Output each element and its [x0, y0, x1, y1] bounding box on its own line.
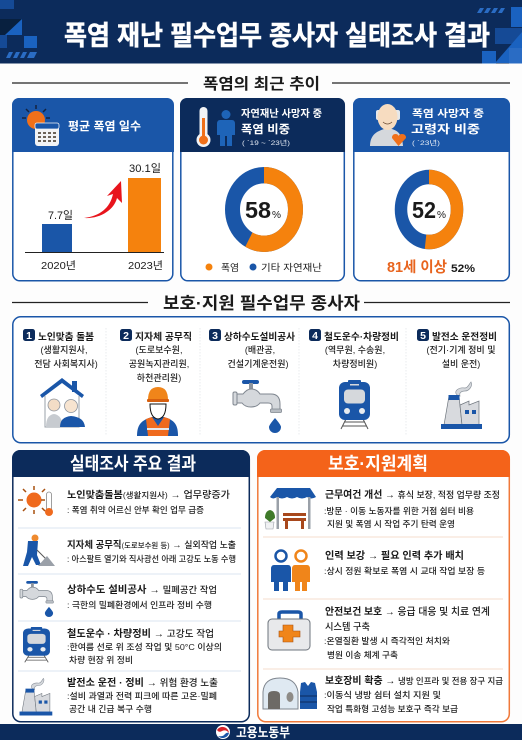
plan: staffing: 인력 보강 → 필요 인력 추가 배치: [325, 549, 464, 562]
worker 3: water and sewage: 상하수도설비공사: [224, 331, 295, 343]
result: power plant: 공간 내 긴급 복구 수행: [69, 704, 152, 714]
panel heading: 폭염 사망자 중: [412, 107, 484, 120]
worker 3: water and sewage: 건설기계운전원): [228, 358, 288, 369]
panel: elderly share of heatwave deaths: [353, 98, 510, 281]
result: local government: [23, 534, 236, 566]
icon: thermometer: [196, 107, 210, 147]
icon: government logo: [216, 725, 230, 739]
panel heading: 자연재난 사망자 중: [241, 107, 322, 120]
bar chart: 2023년: [128, 260, 163, 272]
result: elderly care: [18, 486, 230, 516]
section heading: essential workers: 보호·지원 필수업무 종사자: [163, 294, 360, 313]
donut chart: 52 percent: [401, 177, 457, 242]
plan: protective equipment: 보호장비 확충 → 냉방 인프라 및 전용 장구 지급: [325, 674, 503, 687]
result: water and sewage: [20, 581, 217, 617]
header banner: [0, 0, 522, 64]
result: power plant: 발전소 운전 · 정비 → 위험 환경 노출: [67, 676, 218, 689]
result: railway: :한여름 선로 위 조성 작업 및 50°C 이상의: [67, 642, 222, 652]
icon: sun and thermometer: [18, 486, 53, 516]
worker 4: railway: 철도운수·차량정비: [324, 331, 399, 343]
bar chart: 7.7일: [48, 208, 73, 222]
plan: staffing: :상시 정원 확보로 폭염 시 교대 작업 보장 등: [324, 566, 485, 576]
worker 5: power plant: (전기·기계 정비 및: [427, 344, 495, 355]
panel heading: 보호·지원계획: [328, 454, 428, 474]
worker 3: water and sewage: [209, 329, 295, 433]
panel: survey key results: [12, 450, 250, 722]
title: 폭염 재난 필수업무 종사자 실태조사 결과: [64, 21, 490, 51]
ministry name: 고용노동부: [236, 725, 290, 740]
plan: working conditions: [265, 488, 500, 529]
worker 2: local government: (도로보수원,: [136, 344, 182, 355]
result: local government: : 아스팔트 열기와 직사광선 아래 고강도 노동 수행: [67, 554, 236, 564]
plan: working conditions: 지원 및 폭염 시 작업 주기 탄력 운영: [327, 519, 455, 529]
result: water and sewage: 상하수도 설비공사 → 밀폐공간 작업: [67, 583, 217, 596]
caption: age 81 and over: 52%: [451, 263, 475, 275]
result: elderly care: : 폭염 취약 어르신 안부 확인 업무 급증: [67, 505, 204, 515]
result: elderly care: 노인맞춤돌봄 (생활지원사) → 업무량증가: [67, 489, 230, 501]
donut chart: 58 percent: %: [272, 209, 281, 221]
panel heading: ( `23년): [412, 138, 440, 147]
icon: factory: [441, 382, 482, 429]
panel heading: ( `19 ~ `23년): [242, 138, 290, 147]
legend: 폭염: [221, 263, 239, 274]
icon: shelter with bench: [265, 488, 316, 529]
section heading: recent trend: 폭염의 최근 추이: [203, 75, 320, 93]
legend: [206, 263, 322, 274]
icon: train: [23, 627, 50, 662]
result: railway: 철도운수 · 차량정비 → 고강도 작업: [67, 627, 214, 640]
arrow: increase: [84, 181, 122, 218]
panel: heatwave share of natural disaster deaths: [180, 98, 345, 281]
plan: safety and health: [268, 605, 490, 660]
result: water and sewage: : 극한의 밀폐환경에서 인프라 정비 수행: [67, 600, 212, 610]
result: power plant: :설비 과열과 전력 피크에 따른 고온·밀폐: [67, 691, 217, 701]
plan: working conditions: 근무여건 개선 → 휴식 보장, 적정 업무량 조정: [325, 488, 500, 501]
result: local government: 지자체 공무직(도로보수원 등) → 실외작업 노출: [67, 539, 236, 551]
panel: protection and support plan: [257, 450, 510, 722]
icon: road worker with shovel: [23, 534, 55, 566]
worker 2: local government: 공원녹지관리원,: [129, 358, 189, 369]
worker 5: power plant: 발전소 운전정비: [432, 331, 497, 343]
plan: safety and health: 병원 이송 체계 구축: [327, 650, 398, 660]
worker 4: railway: [309, 329, 399, 429]
panel heading: [241, 107, 322, 147]
result: power plant: [20, 676, 218, 716]
icon: faucet: [233, 380, 282, 433]
panel: average heatwave days: [12, 98, 174, 281]
panel heading: 폭염 비중: [241, 123, 290, 136]
donut chart: 58 percent: [232, 175, 296, 244]
worker 3: water and sewage: 3: [212, 330, 218, 342]
icon: cooling tent and vest: [263, 678, 317, 709]
result: railway: [23, 627, 222, 665]
panel: essential worker groups: [13, 317, 509, 443]
worker 2: local government: 지자체 공무직: [135, 331, 192, 343]
worker 4: railway: (역무원, 수송원,: [325, 344, 385, 355]
plan: protective equipment: :이동식 냉방 쉼터 설치 지원 및: [324, 690, 441, 700]
plan: safety and health: 안전보건 보호 → 응급 대응 및 치료 연계: [325, 605, 490, 618]
result: railway: 차량 현장 위 정비: [69, 655, 133, 665]
bar chart: 2020년: [41, 260, 76, 272]
worker 5: power plant: 설비 운전): [442, 358, 480, 369]
icon: first aid kit: [268, 612, 310, 650]
icon: sun and calendar: [22, 105, 59, 146]
panel heading: [411, 107, 484, 147]
worker 5: power plant: [417, 329, 497, 429]
donut chart: 52 percent: %: [437, 209, 446, 221]
plan: staffing: [271, 549, 485, 591]
icon: road worker: [137, 387, 178, 436]
worker 1: elderly care: 전담 사회복지사): [34, 358, 98, 369]
plan: protective equipment: [263, 674, 503, 714]
plan: safety and health: 시스템 구축: [325, 621, 370, 633]
donut chart: 58 percent: 58: [245, 197, 271, 223]
icon: faucet: [20, 581, 53, 617]
icon: home with elderly couple: [40, 378, 85, 427]
panel heading: 실태조사 주요 결과: [70, 454, 196, 474]
icon: factory: [20, 678, 52, 716]
icon: elderly person with heart: [370, 104, 406, 146]
worker 1: elderly care: (생활지원사,: [41, 344, 87, 355]
icon: train: [339, 380, 370, 429]
worker 1: elderly care: [23, 329, 98, 427]
worker 4: railway: 차량정비원): [333, 358, 377, 369]
worker 1: elderly care: 1: [26, 330, 32, 342]
worker 4: railway: 4: [312, 330, 318, 342]
bar chart: 30.1일: [129, 161, 161, 175]
worker 5: power plant: 5: [420, 330, 426, 342]
panel heading: 평균 폭염 일수: [68, 119, 141, 133]
caption: age 81 and over: [387, 259, 475, 276]
bar chart: [25, 161, 164, 272]
footer banner: [0, 724, 522, 740]
icon: two workers: [271, 550, 310, 591]
worker 2: local government: 하천관리원): [137, 372, 181, 383]
worker 2: local government: [120, 329, 192, 436]
panel heading: 고령자 비중: [411, 123, 480, 136]
plan: working conditions: :방문 · 이동 노동자를 위한 거점 쉼터 비용: [324, 506, 474, 516]
caption: age 81 and over: 81세 이상: [387, 259, 447, 276]
worker 3: water and sewage: (배관공,: [245, 344, 275, 355]
donut chart: 52 percent: 52: [412, 197, 436, 223]
worker 2: local government: 2: [123, 330, 129, 342]
legend: 기타 자연재난: [261, 263, 322, 274]
worker 1: elderly care: 노인맞춤 돌봄: [38, 331, 94, 343]
icon: person: [217, 110, 235, 146]
plan: safety and health: :온열질환 발생 시 즉각적인 처치와: [324, 636, 450, 646]
plan: protective equipment: 작업 특화형 고성능 보호구 즉각 보급: [327, 704, 458, 714]
